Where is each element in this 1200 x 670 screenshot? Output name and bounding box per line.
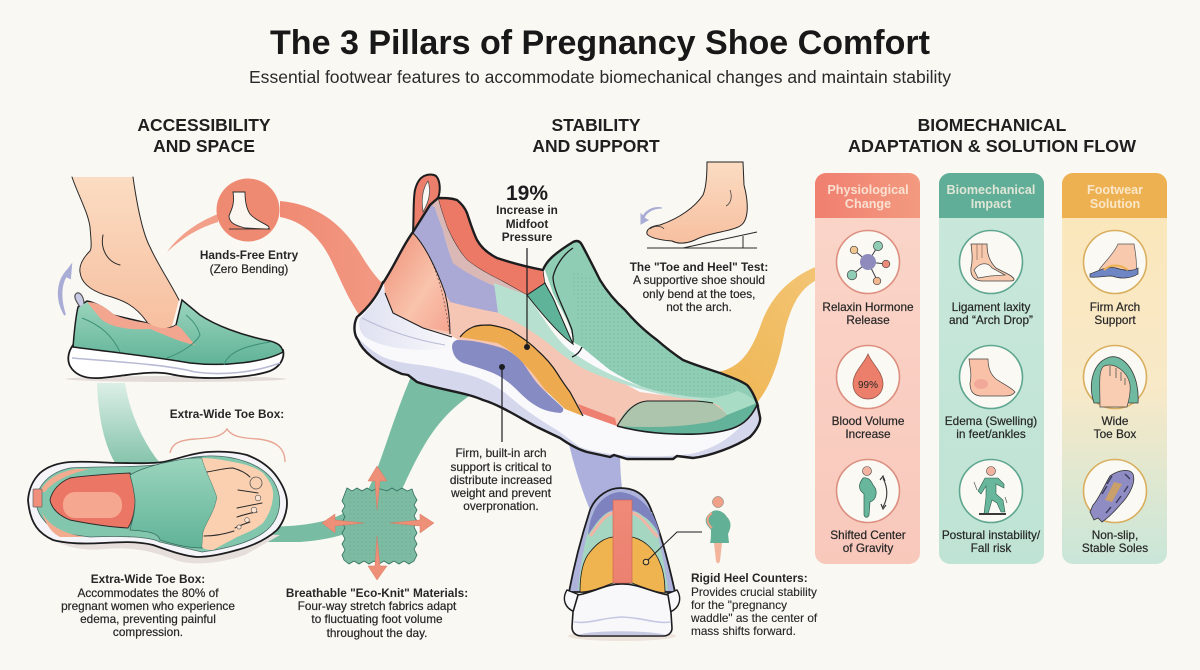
upper outline <box>383 198 758 406</box>
label: postural instability: Fall risk <box>971 541 1011 555</box>
stat: 19% midfoot pressure <box>496 182 558 244</box>
pink band beside lining <box>430 198 527 295</box>
ribbon: coral thin arc to leg <box>167 214 218 252</box>
ribbon: green from main shoe to eco-knit patch <box>255 372 475 542</box>
icon: main cutaway shoe <box>354 174 760 459</box>
heading: biomechanical adaptation and solution flow: BIOMECHANICAL <box>918 115 1067 135</box>
callout: 19% pressure line and dot <box>524 248 530 350</box>
label: hands-free entry: (Zero Bending) <box>210 262 288 276</box>
panel: biomechanical impact <box>939 173 1044 564</box>
title: The 3 Pillars of Pregnancy Shoe Comfort <box>270 24 930 62</box>
outer sole <box>354 282 760 459</box>
heading: accessibility and space: ACCESSIBILITY <box>137 115 271 135</box>
icon: top-down shoe <box>28 452 287 563</box>
text: toe and heel test <box>630 260 768 314</box>
icon: pregnant woman figure <box>706 496 730 563</box>
heel strap <box>613 500 632 583</box>
text: toe and heel test: The "Toe and Heel" Test: <box>630 260 768 274</box>
label: relaxin hormone release: Relaxin Hormone <box>822 300 914 314</box>
label: firm arch support: Support <box>1094 313 1136 327</box>
stat: 19% midfoot pressure: Pressure <box>502 230 553 244</box>
text: rigid heel counters: mass shifts forward. <box>691 624 796 638</box>
header: physiological change: Change <box>845 197 891 211</box>
shoe upper <box>73 300 283 364</box>
inner collar <box>588 492 660 535</box>
icon: side shoe with foot stepping in <box>66 177 286 382</box>
dashed stitching <box>413 233 449 330</box>
green front upper <box>545 241 757 403</box>
text: rigid heel counters: Rigid Heel Counters: <box>691 571 808 585</box>
red lining <box>438 198 545 295</box>
header: physiological change: Physiological <box>827 183 909 197</box>
text: toe and heel test: only bend at the toes, <box>643 287 755 301</box>
teal heel panel <box>578 512 668 590</box>
shoe pull tab <box>75 293 84 307</box>
text: firm arch support: weight and prevent <box>450 486 552 500</box>
text: eco-knit materials: Breathable "Eco-Knit" Materials: <box>286 586 468 600</box>
text: rigid heel counters: waddle" as the center of <box>690 611 818 625</box>
header: biomechanical impact <box>939 173 1044 218</box>
text: firm arch support: distribute increased <box>450 473 552 487</box>
yellow heel counter <box>580 537 665 593</box>
text: firm arch support <box>450 446 552 513</box>
text: rigid heel counters: for the "pregnancy <box>691 598 787 612</box>
icon: relaxin molecule <box>836 230 900 294</box>
icon: bending arrow <box>641 208 662 224</box>
label: postural instability: Postural instability/ <box>942 528 1041 542</box>
label: firm arch support <box>1090 300 1140 327</box>
bracket over toe box <box>170 429 285 462</box>
icon: wide toe box <box>1084 346 1146 408</box>
toes <box>204 468 262 536</box>
red midfoot stripe <box>578 404 617 426</box>
label: wide toe box: Toe Box <box>1094 427 1136 441</box>
text: extra-wide toe box: Extra-Wide Toe Box: <box>91 572 205 586</box>
pale salmon base of upper <box>384 232 757 434</box>
ribbon: coral flow from hands-free entry to main shoe <box>280 201 390 322</box>
icon: hands-free foot circle <box>216 178 280 242</box>
stat: 19% midfoot pressure: Midfoot <box>506 217 548 231</box>
pale heel sole shading <box>359 287 452 350</box>
label: edema: in feet/ankles <box>956 427 1026 441</box>
icon: postural instability figure <box>960 460 1022 522</box>
heel coral panel <box>384 232 450 332</box>
label: postural instability <box>942 528 1041 555</box>
label: blood volume increase <box>832 414 905 441</box>
label: edema <box>945 414 1037 441</box>
ribbon: green from side shoe to top-down shoe <box>97 383 160 463</box>
text: extra-wide toe box: pregnant women who experience <box>61 599 235 613</box>
heading: accessibility and space <box>137 115 271 156</box>
icon: non-slip sole <box>1084 460 1146 522</box>
purple arch support <box>452 340 563 413</box>
label: ligament laxity <box>949 300 1033 327</box>
shoe green vamp <box>130 458 217 548</box>
panel: footwear solution <box>1062 173 1167 564</box>
heading: biomechanical adaptation and solution flow: ADAPTATION & SOLUTION FLOW <box>848 136 1136 156</box>
white midsole <box>354 282 757 456</box>
side flanges <box>564 590 680 612</box>
icon: blood drop 99% <box>836 346 900 408</box>
text: eco-knit materials: throughout the day. <box>327 626 427 640</box>
text: firm arch support: overpronation. <box>463 499 539 513</box>
callout: arch support line and dot <box>499 364 505 442</box>
label: shifted center of gravity: Shifted Center <box>830 528 906 542</box>
label: relaxin hormone release <box>822 300 914 327</box>
white heel sole <box>572 584 672 636</box>
label: non-slip stable soles: Non-slip, <box>1092 528 1138 542</box>
heading: stability and support <box>532 115 660 156</box>
label: wide toe box: Wide <box>1102 414 1129 428</box>
icon: blood drop 99%: 99% <box>858 380 878 391</box>
text: eco-knit materials: to fluctuating foot volume <box>311 612 443 626</box>
pale teal vamp band <box>494 283 745 401</box>
shoe orange trim <box>40 469 90 537</box>
shoe details <box>82 315 270 365</box>
header: footwear solution: Solution <box>1090 197 1140 211</box>
header: biomechanical impact: Biomechanical <box>947 183 1035 197</box>
label: hands-free entry: Hands-Free Entry <box>200 248 299 262</box>
icon: swollen foot <box>960 346 1022 408</box>
light green toe rim <box>693 391 757 420</box>
header: footwear solution: Footwear <box>1087 183 1143 197</box>
label: shifted center of gravity: of Gravity <box>843 541 893 555</box>
header: physiological change <box>815 173 920 218</box>
text: toe and heel test: not the arch. <box>666 300 732 314</box>
panel: physiological change <box>815 173 920 564</box>
pull tab <box>413 174 440 232</box>
header: footwear solution <box>1062 173 1167 218</box>
label: edema: Edema (Swelling) <box>945 414 1037 428</box>
label: ligament laxity: Ligament laxity <box>952 300 1030 314</box>
bare foot <box>202 458 273 550</box>
ribbon: purple from main shoe to heel view <box>568 440 622 510</box>
dark green tongue gusset <box>527 283 573 344</box>
label: blood volume increase: Increase <box>845 427 891 441</box>
stat: 19% midfoot pressure: 19% <box>506 182 548 205</box>
leg <box>72 177 179 328</box>
shoe shadow <box>36 525 280 563</box>
icon: foot with bones <box>960 230 1022 294</box>
label: hands-free entry <box>200 248 299 276</box>
text: rigid heel counters <box>690 571 818 638</box>
orange arch layer <box>460 325 583 416</box>
text: extra-wide toe box: Accommodates the 80% of <box>78 586 219 600</box>
label: relaxin hormone release: Release <box>846 313 890 327</box>
text: firm arch support: Firm, built-in arch <box>455 446 547 460</box>
text: eco-knit materials <box>286 586 468 640</box>
label: non-slip stable soles <box>1082 528 1148 555</box>
shoe sole <box>68 345 283 378</box>
icon: firm arch support <box>1084 230 1146 294</box>
text: eco-knit materials: Four-way stretch fabrics adapt <box>298 599 457 613</box>
heading: stability and support: STABILITY <box>551 115 641 135</box>
shoe outer sole <box>28 452 287 557</box>
label: blood volume increase: Blood Volume <box>832 414 905 428</box>
shoe lining <box>50 473 135 528</box>
subtitle: Essential footwear features to accommodate biomechanical changes and maintain stability <box>249 67 951 87</box>
ribbon: yellow from main shoe to relaxin icon <box>718 260 836 404</box>
icon: lift arrow <box>59 266 71 315</box>
shoe green rim <box>36 456 280 552</box>
purple collar band <box>413 205 500 313</box>
callout: heel counter line <box>643 532 702 565</box>
icon: foot on toe-and-heel test ramp <box>647 162 757 248</box>
label: firm arch support: Firm Arch <box>1090 300 1140 314</box>
header: biomechanical impact: Impact <box>971 197 1012 211</box>
shoe heel tab <box>33 489 42 507</box>
text: extra-wide toe box: edema, preventing painful <box>80 612 216 626</box>
shoe lining <box>87 302 195 345</box>
heading: stability and support: AND SUPPORT <box>532 136 660 156</box>
text: toe and heel test: A supportive shoe should <box>633 273 765 287</box>
sole outline <box>354 282 760 459</box>
icon: rear heel view of shoe <box>564 488 680 641</box>
text: firm arch support: support is critical to <box>451 460 552 474</box>
icon: shifted center of gravity <box>836 460 900 522</box>
text: rigid heel counters: Provides crucial stability <box>691 585 817 599</box>
label: extra-wide toe box callout: Extra-Wide Toe Box: <box>170 407 284 421</box>
label: non-slip stable soles: Stable Soles <box>1082 541 1148 555</box>
text: extra-wide toe box: compression. <box>113 625 183 639</box>
heading: accessibility and space: AND SPACE <box>153 136 255 156</box>
heel outer <box>569 488 675 592</box>
heel seam <box>413 233 450 334</box>
text: extra-wide toe box <box>61 572 235 639</box>
tongue seam <box>553 248 582 357</box>
label: wide toe box <box>1094 414 1136 441</box>
label: shifted center of gravity <box>830 528 906 555</box>
icon: eco-knit patch with stretch arrows <box>322 466 434 580</box>
label: ligament laxity: and “Arch Drop” <box>949 313 1033 327</box>
heading: biomechanical adaptation and solution flow <box>848 115 1136 156</box>
clear toe cap <box>617 401 727 427</box>
stat: 19% midfoot pressure: Increase in <box>496 203 558 217</box>
